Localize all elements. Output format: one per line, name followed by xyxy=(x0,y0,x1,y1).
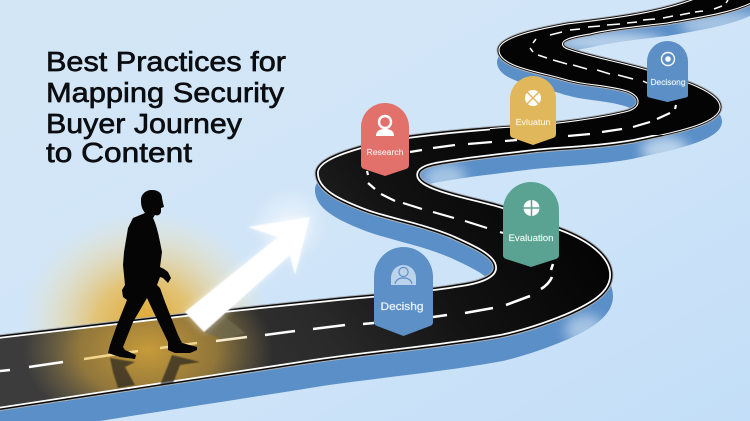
golden light on road xyxy=(30,310,267,398)
label: evaluation: Evaluation xyxy=(508,233,554,243)
icon: person xyxy=(376,116,394,136)
icon: cross circle xyxy=(524,200,540,216)
title: Buyer Journey xyxy=(46,108,242,139)
title: Mapping Security xyxy=(46,77,284,108)
arrow head glow xyxy=(252,187,328,263)
pin: evaluation yellow xyxy=(510,76,556,145)
label: decisong: Decisong xyxy=(650,78,686,87)
icon: person in dome xyxy=(391,265,416,285)
pin: evaluation green xyxy=(503,182,559,267)
title: Best Practices for xyxy=(46,46,286,77)
label: evluatun: Evluatun xyxy=(516,117,551,127)
title xyxy=(46,46,286,168)
pin: decision small xyxy=(647,41,688,102)
pin: decision large xyxy=(374,247,433,336)
title: to Content xyxy=(46,137,192,168)
sunrise glow behind walker xyxy=(30,220,258,330)
walking man silhouette xyxy=(108,190,197,359)
label: decishg: Decishg xyxy=(380,301,424,313)
pin: research xyxy=(361,103,409,176)
glowing white arrow xyxy=(185,217,310,332)
icon: crossed circle xyxy=(525,90,541,106)
icon: star ring xyxy=(662,52,674,66)
walker reflection xyxy=(110,355,200,388)
label: research: Research xyxy=(366,147,404,157)
